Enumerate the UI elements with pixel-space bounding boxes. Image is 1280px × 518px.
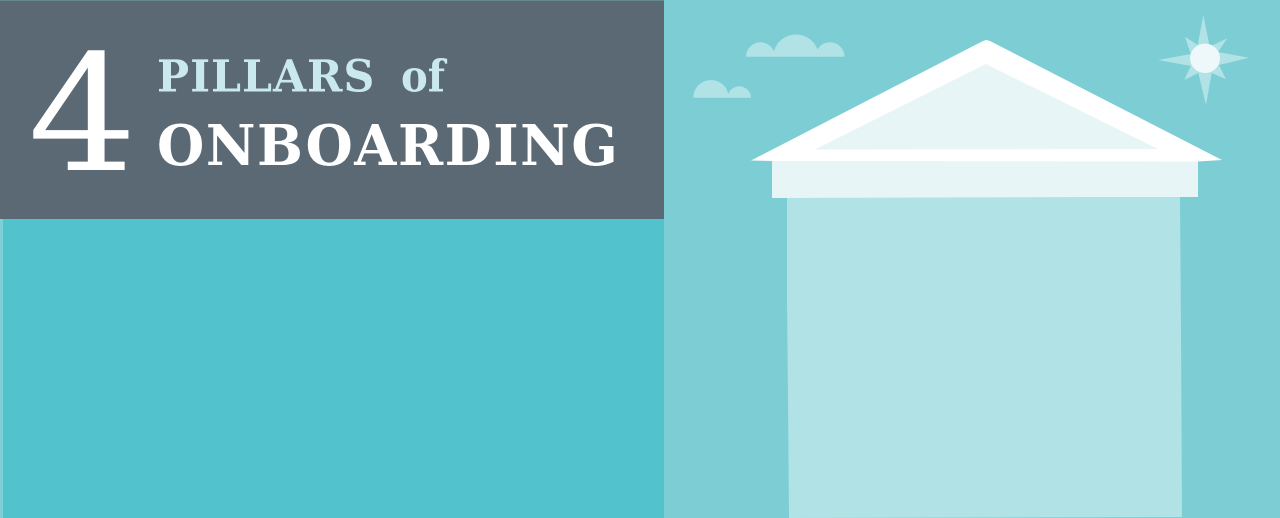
entablature bbox=[772, 161, 1198, 198]
icon: sun bbox=[1158, 15, 1249, 105]
title numeral: 4 bbox=[28, 22, 137, 209]
title line: of: of bbox=[401, 52, 448, 102]
title line: onboarding: ONBOARDING bbox=[157, 113, 618, 179]
roof bbox=[751, 40, 1222, 162]
title line: pillars: PILLARS bbox=[157, 51, 374, 103]
building body bbox=[787, 197, 1182, 518]
panel: title block bbox=[0, 0, 664, 219]
panel: sky background bbox=[664, 0, 1280, 518]
pediment bbox=[815, 64, 1158, 150]
icon: small cloud bbox=[693, 80, 751, 98]
icon: large cloud bbox=[746, 34, 844, 57]
panel: teal lower left bbox=[0, 219, 664, 518]
building bbox=[751, 40, 1222, 518]
